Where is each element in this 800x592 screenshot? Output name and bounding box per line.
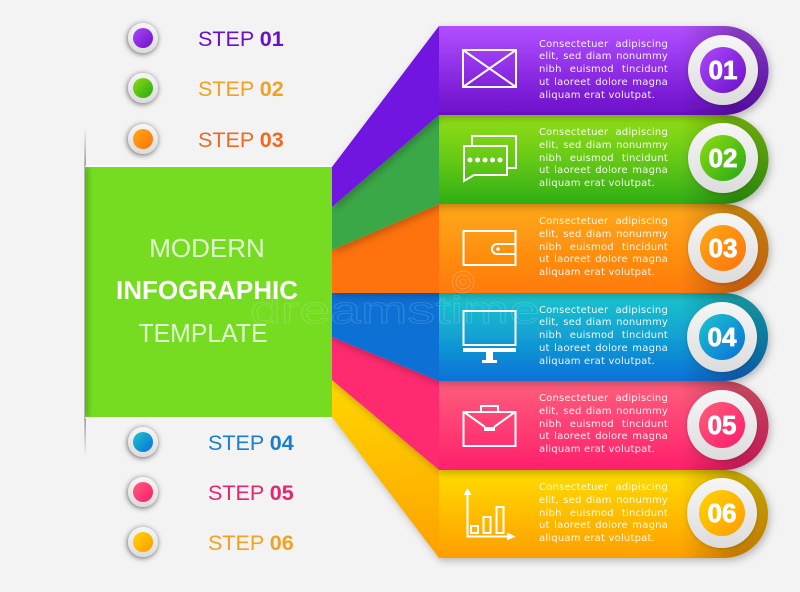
panel: step 03	[332, 204, 768, 293]
number badge 03	[688, 213, 758, 283]
cap shade 04	[680, 293, 768, 381]
text block 05: nibh euismod tincidunt	[539, 419, 668, 430]
label: step 03: STEP 03	[198, 128, 284, 152]
text block 04	[539, 304, 670, 370]
label: step 06: STEP 06	[208, 531, 294, 555]
panel: step 06	[332, 380, 768, 558]
watermark spiral	[452, 271, 474, 293]
text block 03: ut laoreet dolore magna	[539, 254, 668, 265]
watermark word: dreamstime	[250, 290, 540, 332]
cap shade 06	[680, 470, 768, 558]
title line: infographic: INFOGRAPHIC	[116, 275, 298, 305]
text block 02: nibh euismod tincidunt	[539, 153, 668, 164]
text block 05: Consectetuer adipiscing	[539, 393, 668, 404]
wedge 01	[332, 26, 439, 207]
text block 01: elit, sed diam nonummy	[539, 51, 668, 62]
text block 05: aliquam erat volutpat.	[539, 444, 655, 455]
text block 01: nibh euismod tincidunt	[539, 64, 668, 75]
bar 02	[439, 115, 768, 204]
label: step 04: STEP 04	[208, 431, 294, 455]
green title panel	[82, 166, 332, 418]
text block 05: elit, sed diam nonummy	[539, 406, 668, 417]
text block 03	[539, 216, 670, 282]
label: step 02: STEP 02	[198, 77, 284, 101]
text block 03: Consectetuer adipiscing	[539, 216, 668, 227]
icon: chat bubbles	[464, 136, 516, 181]
text block 02	[539, 127, 670, 193]
text block 04: nibh euismod tincidunt	[539, 330, 668, 341]
wedge 05	[332, 337, 439, 470]
text block 03: aliquam erat volutpat.	[539, 267, 655, 278]
text block 06: ut laoreet dolore magna	[539, 520, 668, 531]
text block 06: Consectetuer adipiscing	[539, 482, 668, 493]
text block 04: ut laoreet dolore magna	[539, 343, 668, 354]
number badge 01	[688, 35, 758, 105]
wedge 02	[332, 115, 439, 250]
number badge 02	[688, 123, 758, 193]
wedge 06	[332, 380, 439, 558]
text block 03: nibh euismod tincidunt	[539, 242, 668, 253]
text block 06: elit, sed diam nonummy	[539, 495, 668, 506]
text block 04: aliquam erat volutpat.	[539, 356, 655, 367]
title line: template: TEMPLATE	[138, 318, 268, 348]
text block 02: Consectetuer adipiscing	[539, 127, 668, 138]
panel: step 05	[332, 337, 768, 470]
wedge 04	[332, 293, 439, 381]
text block 04: Consectetuer adipiscing	[539, 304, 668, 316]
text block 01: ut laoreet dolore magna	[539, 77, 668, 88]
number badge 06: 06	[708, 498, 736, 528]
number badge 04: 04	[708, 322, 737, 352]
number badge 03: 03	[709, 233, 737, 263]
bar 06	[439, 470, 768, 558]
text block 01: Consectetuer adipiscing	[539, 38, 668, 50]
text block 06: nibh euismod tincidunt	[539, 508, 668, 519]
number badge 06	[687, 478, 757, 548]
left slit shadow	[84, 127, 86, 457]
cap shade 01	[680, 26, 768, 115]
panel: step 01	[332, 26, 768, 207]
title	[116, 233, 298, 348]
number badge 05	[687, 390, 757, 460]
text block 06: aliquam erat volutpat.	[539, 533, 655, 544]
cap shade 03	[680, 204, 768, 293]
bar 03	[439, 204, 768, 293]
wedge 03	[332, 204, 439, 293]
text block 02: ut laoreet dolore magna	[539, 165, 668, 176]
cap shade 02	[680, 115, 768, 204]
text block 04: elit, sed diam nonummy	[539, 317, 668, 328]
icon: wallet	[464, 231, 516, 265]
number badge 04	[687, 302, 757, 372]
watermark	[250, 271, 540, 332]
text block 01: aliquam erat volutpat.	[539, 90, 655, 101]
icon: briefcase	[464, 406, 516, 446]
label: step 05: STEP 05	[208, 481, 294, 505]
text block 05: ut laoreet dolore magna	[539, 431, 668, 442]
panel: step 04	[332, 293, 768, 381]
number badge 01: 01	[709, 55, 737, 85]
legend dot 02	[128, 73, 158, 103]
number badge 05: 05	[708, 410, 736, 440]
icon: monitor	[463, 311, 516, 362]
legend dot 05	[128, 477, 158, 507]
text block 02: elit, sed diam nonummy	[539, 140, 668, 151]
icon: bar chart	[464, 488, 516, 540]
legend dot 01	[128, 23, 158, 53]
text block 01	[539, 38, 670, 104]
bar 01	[439, 26, 768, 115]
title line: modern: MODERN	[149, 233, 265, 263]
bar 04	[439, 293, 768, 381]
text block 02: aliquam erat volutpat.	[539, 178, 655, 189]
text block 03: elit, sed diam nonummy	[539, 229, 668, 240]
text block 06	[539, 482, 670, 548]
text block 05	[539, 393, 670, 459]
legend dot 04	[128, 427, 158, 457]
number badge 02: 02	[709, 143, 737, 173]
bar 05	[439, 381, 768, 470]
icon: envelope	[463, 50, 516, 87]
panel: step 02	[332, 115, 768, 250]
cap shade 05	[680, 381, 768, 470]
legend dot 06	[128, 527, 158, 557]
label: step 01: STEP 01	[198, 27, 284, 51]
legend dot 03	[128, 124, 158, 154]
